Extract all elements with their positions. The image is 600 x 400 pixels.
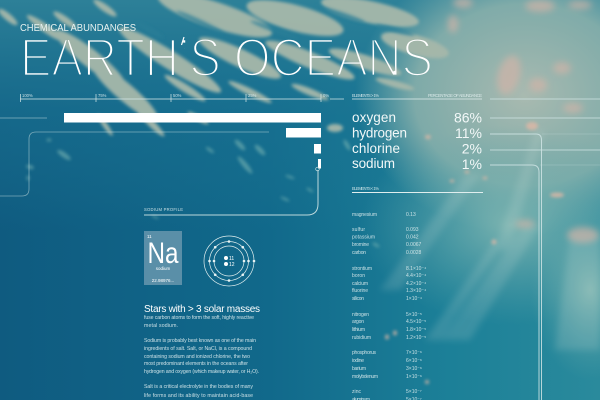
connector lines	[0, 99, 600, 400]
row: oxygen	[352, 110, 482, 126]
chart axis with percentage ticks: 0%	[323, 93, 329, 98]
body copy	[144, 315, 259, 399]
trace table header	[352, 186, 483, 192]
trace element names: argon	[352, 319, 364, 325]
atom diagram: 12	[229, 262, 235, 268]
trace element values: 5×10⁻⁵	[406, 312, 422, 318]
body copy: metal sodium.	[144, 323, 178, 329]
bar: oxygen	[64, 113, 321, 122]
sodium profile label: SODIUM PROFILE	[144, 207, 183, 212]
trace element values: 1.8×10⁻⁵	[406, 327, 426, 333]
row: sodium	[352, 156, 482, 172]
trace element values	[406, 212, 426, 400]
trace element values: 1×10⁻⁴	[406, 296, 422, 302]
trace element names: calcium	[352, 281, 368, 287]
body copy: Salt is a critical electrolyte in the bodies of many	[144, 384, 253, 390]
trace element names	[352, 212, 378, 400]
chart axis with percentage ticks: 75%	[98, 93, 107, 98]
row: hydrogen	[352, 125, 482, 141]
trace element names: zinc	[352, 389, 362, 395]
trace element values: 8.1×10⁻⁴	[406, 266, 426, 272]
trace element names: barium	[352, 366, 366, 372]
body copy: most predominant elements in the oceans after	[144, 361, 248, 367]
table header	[352, 93, 482, 99]
kicker: chemical abundances: CHEMICAL ABUNDANCES	[20, 22, 136, 34]
panel: abundance table over one percent	[352, 93, 482, 172]
row: hydrogen: 11%	[455, 125, 482, 141]
trace element values: 3×10⁻⁶	[406, 366, 422, 372]
periodic table card: Na: 22.98976...	[152, 278, 174, 283]
trace element values: 4.5×10⁻⁵	[406, 319, 426, 325]
trace element names: phosphorus	[352, 350, 376, 356]
table header: PERCENTAGE OF ABUNDANCE	[428, 93, 482, 98]
chart axis with percentage ticks: 50%	[173, 93, 182, 98]
trace element names: nitrogen	[352, 312, 369, 318]
trace element names: boron	[352, 273, 365, 279]
row: chlorine: 2%	[462, 140, 482, 156]
trace element names: molybdenum	[352, 374, 378, 380]
trace element values: 4.2×10⁻⁴	[406, 281, 426, 287]
trace element names: strontium	[352, 266, 372, 272]
trace element values: 1×10⁻⁶	[406, 374, 422, 380]
trace element names: potassium	[352, 234, 375, 240]
trace element values: 0.13	[406, 212, 416, 218]
trace element values: 0.0028	[406, 250, 422, 256]
atom diagram: 11	[229, 256, 234, 262]
trace element values: 0.0067	[406, 242, 422, 248]
periodic table card: Na: sodium	[156, 266, 170, 271]
trace element names: iodine	[352, 358, 364, 364]
title: Earth's Oceans: EARTH’S OCEANS	[20, 28, 433, 88]
trace element values: 6×10⁻⁶	[406, 358, 422, 364]
chart axis with percentage ticks: 100%	[22, 93, 33, 98]
row: chlorine	[352, 140, 482, 156]
body copy: containing sodium and ionized chlorine, the two	[144, 354, 250, 360]
panel: trace elements under one percent	[352, 186, 483, 400]
body copy: life forms and its ability to maintain acid-base	[144, 393, 253, 399]
heading: stars with more than 3 solar masses: Stars with > 3 solar masses	[144, 304, 260, 315]
bar: hydrogen	[286, 128, 321, 138]
trace element values: 0.093	[406, 227, 419, 233]
periodic table card: Na	[144, 231, 182, 285]
panel: sodium profile	[144, 207, 260, 399]
row: hydrogen: hydrogen	[352, 126, 407, 140]
body copy: hydrogen and oxygen (which makeup water, or H₂O).	[144, 369, 259, 375]
trace element names: silicon	[352, 296, 364, 302]
body copy: fuse carbon atoms to form the soft, highly reactive	[144, 315, 254, 321]
row: oxygen: 86%	[454, 110, 482, 126]
trace element names: rubidium	[352, 335, 371, 341]
trace element names: sulfur	[352, 227, 365, 233]
trace element values: 5×10⁻⁷	[406, 389, 422, 395]
trace element values: 1.2×10⁻⁵	[406, 335, 426, 341]
trace element names: bromine	[352, 242, 369, 248]
row: oxygen: oxygen	[352, 110, 396, 125]
body copy: Sodium is probably best known as one of the main	[144, 338, 256, 344]
table header: ELEMENTS > 1%	[352, 93, 379, 98]
row: chlorine: chlorine	[352, 141, 400, 156]
atom diagram	[204, 236, 255, 286]
periodic table card: Na: 11	[147, 234, 152, 239]
chart axis with percentage ticks	[20, 93, 329, 102]
trace element names: carbon	[352, 250, 366, 256]
bar chart: elements above one percent	[20, 93, 329, 168]
row: sodium: sodium	[352, 156, 395, 171]
trace element names: lithium	[352, 327, 365, 333]
bar: chlorine	[314, 144, 321, 154]
title group	[20, 24, 430, 76]
periodic table card: Na: Na	[148, 237, 179, 270]
trace element values: 7×10⁻⁶	[406, 350, 422, 356]
bar: sodium	[318, 159, 321, 168]
body copy: ingredients of salt. Salt, or NaCl, is a compound	[144, 346, 252, 352]
trace element values: 4.4×10⁻⁴	[406, 273, 426, 279]
trace element names: magnesium	[352, 212, 377, 218]
row: sodium: 1%	[462, 156, 482, 172]
trace element names: fluorine	[352, 288, 368, 294]
trace element values: 0.042	[406, 234, 419, 240]
chart axis with percentage ticks: 25%	[248, 93, 257, 98]
trace table header: ELEMENTS < 1%	[352, 186, 379, 191]
trace element values: 1.3×10⁻⁴	[406, 288, 426, 294]
